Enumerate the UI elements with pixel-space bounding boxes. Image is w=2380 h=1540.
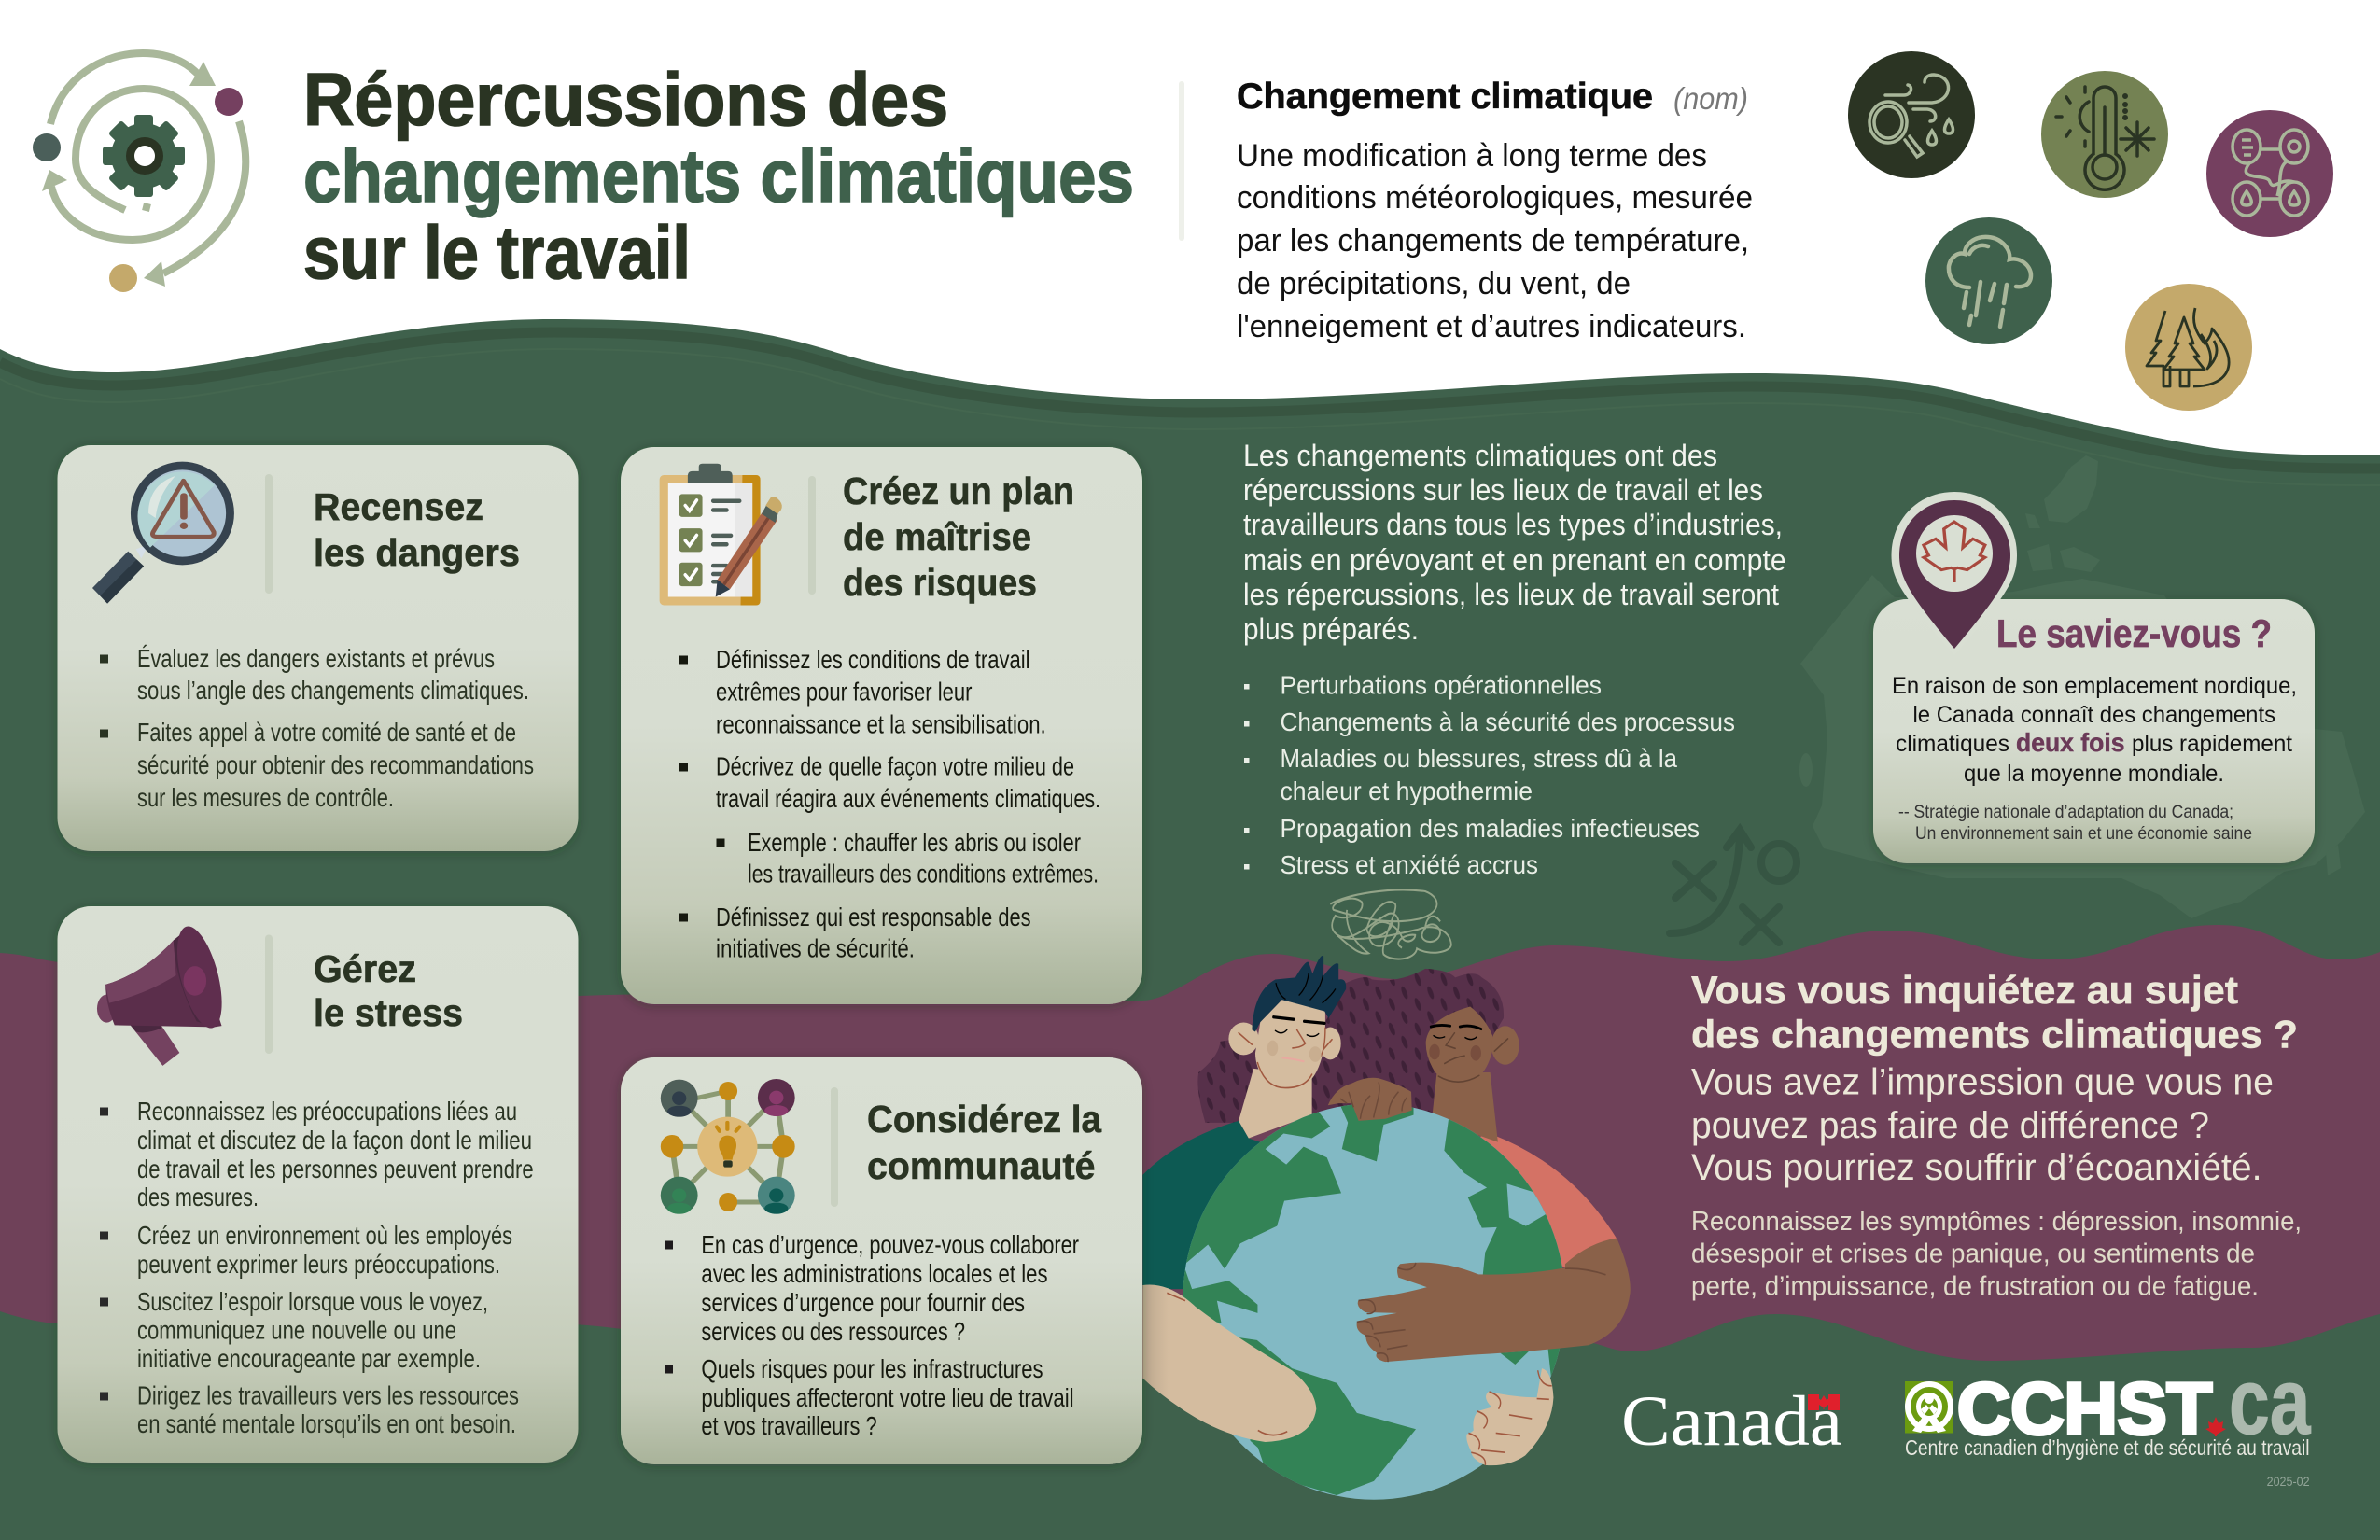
eco-anxiety heading (1691, 968, 2298, 1057)
logo: CCHST.ca: Centre canadien d’hygiène et de sécurité au travail (1905, 1435, 2309, 1460)
definition body (1237, 138, 1753, 344)
date code: 2025-02 (2267, 1474, 2310, 1489)
bullet list: et vos travailleurs ? (701, 1411, 877, 1440)
intro text: plus préparés. (1243, 612, 1419, 646)
strategy sketch X O arrow (1670, 830, 1797, 943)
man's hand (1466, 1368, 1553, 1465)
bullet list: Reconnaissez les préoccupations liées au (137, 1097, 517, 1126)
bullet list: climat et discutez de la façon dont le milieu (137, 1126, 532, 1155)
divider (831, 1087, 838, 1207)
intro text (1243, 439, 1786, 646)
bullet list: Exemple : chauffer les abris ou isoler (748, 828, 1081, 857)
source: Un environnement sain et une économie saine (1915, 824, 2252, 844)
woman's head and neck (1426, 1007, 1519, 1142)
definition body: l'enneigement et d’autres indicateurs. (1237, 309, 1746, 344)
divider (808, 476, 816, 595)
bullet list: avec les administrations locales et les (701, 1259, 1048, 1288)
panel: Le saviez-vous (1873, 492, 2315, 863)
title: Répercussions des (303, 58, 948, 141)
eco-anxiety symptoms (1691, 1207, 2302, 1302)
bullet list: En cas d’urgence, pouvez-vous collaborer (701, 1230, 1079, 1259)
icon: trees and wildfire (2125, 284, 2252, 411)
fact text: que la moyenne mondiale. (1964, 761, 2224, 787)
fact text: deux fois (2016, 728, 2124, 757)
eco-anxiety heading: des changements climatiques ? (1691, 1012, 2298, 1057)
definition heading: (nom) (1673, 81, 1748, 116)
bullet list: services ou des ressources ? (701, 1317, 965, 1346)
bullet list: de travail et les personnes peuvent prendre (137, 1155, 534, 1183)
eco-anxiety symptoms: perte, d’impuissance, de frustration ou de fatigue. (1691, 1272, 2259, 1302)
bullet list: Dirigez les travailleurs vers les ressources (137, 1381, 519, 1409)
intro text: répercussions sur les lieux de travail et les (1243, 473, 1763, 507)
bullet list: sur les mesures de contrôle. (137, 783, 394, 812)
man's arm (1142, 1284, 1316, 1442)
woman's hair (1197, 969, 1504, 1123)
icon: thermometer, sun, snow (2041, 71, 2168, 198)
bullet list: Évaluez les dangers existants et prévus (137, 644, 495, 673)
panel: Gérez le stress (58, 906, 579, 1463)
bullet list: initiative encourageante par exemple. (137, 1344, 481, 1373)
eco-anxiety symptoms: Reconnaissez les symptômes : dépression, insomnie, (1691, 1207, 2302, 1237)
woman's arm and hand (1357, 1238, 1631, 1362)
list of impacts: Stress et anxiété accrus (1281, 850, 1538, 879)
bullet list (665, 1230, 1079, 1440)
intro text: mais en prévoyant et en prenant en compte (1243, 543, 1786, 577)
heading (314, 485, 520, 574)
list of impacts: Maladies ou blessures, stress dû à la (1281, 744, 1677, 773)
icon: community network (661, 1079, 795, 1214)
bullet list: Décrivez de quelle façon votre milieu de (716, 752, 1074, 781)
heading: Gérez (314, 947, 416, 990)
definition body: de précipitations, du vent, de (1237, 266, 1631, 301)
fact text: En raison de son emplacement nordique, (1892, 673, 2297, 699)
woman's shirt (1472, 1134, 1617, 1267)
bullet list: des mesures. (137, 1183, 259, 1211)
Great Lakes notch in map (1799, 753, 1813, 787)
logo: CCHST.ca: CCHST (1957, 1367, 2212, 1449)
divider (1179, 81, 1184, 241)
heading: des risques (843, 561, 1037, 604)
heading: de maîtrise (843, 515, 1031, 558)
bullet list: Définissez qui est responsable des (716, 903, 1031, 931)
man's shirt (1142, 1121, 1305, 1289)
definition heading: Changement climatique (1237, 77, 1653, 117)
bullet list: Faites appel à votre comité de santé et de (137, 718, 516, 747)
list of impacts: Propagation des maladies infectieuses (1281, 814, 1700, 843)
icon: CCHST emblem (1905, 1381, 1953, 1434)
icon: gear with cycle arrows (33, 53, 245, 292)
intro text: travailleurs dans tous les types d’industries, (1243, 508, 1783, 541)
title: changements climatiques (303, 134, 1134, 217)
woman's fingers on top of globe (1328, 1078, 1412, 1121)
green wave background (0, 319, 2380, 1540)
bullet list (100, 644, 534, 812)
source (1898, 803, 2252, 844)
icon: map pin with maple leaf (1891, 492, 2017, 655)
divider (265, 474, 273, 594)
icon: magnifier with warning triangle (92, 462, 234, 604)
heading: les dangers (314, 531, 520, 574)
eco-anxiety question: Vous pourriez souffrir d’écoanxiété. (1691, 1147, 2262, 1188)
source: -- Stratégie nationale d’adaptation du Canada; (1898, 803, 2233, 822)
list of impacts: Changements à la sécurité des processus (1281, 707, 1735, 736)
map of Canada watermark (1800, 455, 2365, 918)
logo: CCHST.ca (1905, 1350, 2312, 1460)
bullet list: initiatives de sécurité. (716, 934, 915, 963)
eco-anxiety question: pouvez pas faire de différence ? (1691, 1105, 2209, 1146)
icon: checklist clipboard with pencil (660, 464, 782, 605)
fact text: plus rapidement (2132, 731, 2292, 757)
definition body: par les changements de température, (1237, 223, 1749, 259)
intro text: les répercussions, les lieux de travail seront (1243, 578, 1779, 611)
bullet list: Quels risques pour les infrastructures (701, 1354, 1043, 1383)
bullet list: services d’urgence pour fournir des (701, 1288, 1025, 1317)
heading: Considérez la (867, 1098, 1102, 1141)
heading (867, 1098, 1102, 1187)
bullet list (100, 1097, 534, 1438)
intro text: Les changements climatiques ont des (1243, 439, 1717, 472)
bullet list: Créez un environnement où les employés (137, 1221, 512, 1250)
logo: CCHST.ca: ca (2229, 1350, 2312, 1454)
icon: connected weather impacts (2206, 110, 2333, 237)
logo: Canada wordmark: Canada (1621, 1382, 1842, 1461)
panel: Recensez les dangers (58, 445, 579, 851)
definition body: Une modification à long terme des (1237, 138, 1707, 174)
heading: Créez un plan (843, 469, 1074, 512)
eco-anxiety symptoms: désespoir et crises de panique, ou sentiments de (1691, 1239, 2255, 1269)
bullet list: sécurité pour obtenir des recommandations (137, 750, 534, 779)
bullet list: Définissez les conditions de travail (716, 645, 1030, 674)
heading: Recensez (314, 485, 483, 528)
fact text: climatiques (1896, 731, 2009, 757)
heading: communauté (867, 1144, 1096, 1187)
bullet list: reconnaissance et la sensibilisation. (716, 710, 1046, 739)
man's head and neck (1228, 956, 1346, 1138)
heading (843, 469, 1074, 604)
icon: megaphone (97, 921, 231, 1066)
bullet list: peuvent exprimer leurs préoccupations. (137, 1250, 500, 1279)
bullet list: communiquez une nouvelle ou une (137, 1316, 456, 1344)
eco-anxiety question: Vous avez l’impression que vous ne (1691, 1062, 2274, 1103)
bullet list: sous l’angle des changements climatiques. (137, 676, 529, 705)
heading: le stress (314, 991, 463, 1034)
panel: Créez un plan de maîtrise des risques (621, 447, 1142, 1004)
title (303, 58, 1134, 294)
fact text (1892, 673, 2297, 787)
divider (265, 935, 273, 1054)
panel: Considérez la communauté (621, 1057, 1142, 1464)
bullet list: extrêmes pour favoriser leur (716, 678, 973, 707)
icon: red maple leaf dot (2205, 1417, 2226, 1436)
list of impacts: Perturbations opérationnelles (1281, 671, 1602, 700)
globe (1172, 1096, 1572, 1500)
purple wave band (0, 925, 2380, 1379)
fact text: le Canada connaît des changements (1913, 702, 2275, 728)
eco-anxiety heading: Vous vous inquiétez au sujet (1691, 968, 2238, 1012)
definition body: conditions météorologiques, mesurée (1237, 180, 1753, 216)
icon: rain cloud (1925, 217, 2052, 344)
list of impacts: chaleur et hypothermie (1281, 777, 1533, 805)
icon: wind, magnifier, droplets (1848, 51, 1975, 178)
bullet list: en santé mentale lorsqu’ils en ont besoin. (137, 1409, 516, 1438)
scribble of worry (1330, 889, 1451, 959)
eco-anxiety question (1691, 1062, 2274, 1188)
illustration: two people holding the globe (1142, 889, 1631, 1500)
title: sur le travail (303, 211, 691, 294)
list of impacts (1244, 671, 1735, 879)
bullet list (679, 645, 1100, 963)
bullet list: publiques affecteront votre lieu de travail (701, 1383, 1074, 1412)
heading (314, 947, 463, 1034)
heading: Le saviez-vous ? (1996, 611, 2272, 655)
bullet list: Suscitez l’espoir lorsque vous le voyez, (137, 1287, 488, 1316)
bullet list: les travailleurs des conditions extrêmes. (748, 860, 1099, 889)
bullet list: travail réagira aux événements climatiques. (716, 784, 1100, 813)
